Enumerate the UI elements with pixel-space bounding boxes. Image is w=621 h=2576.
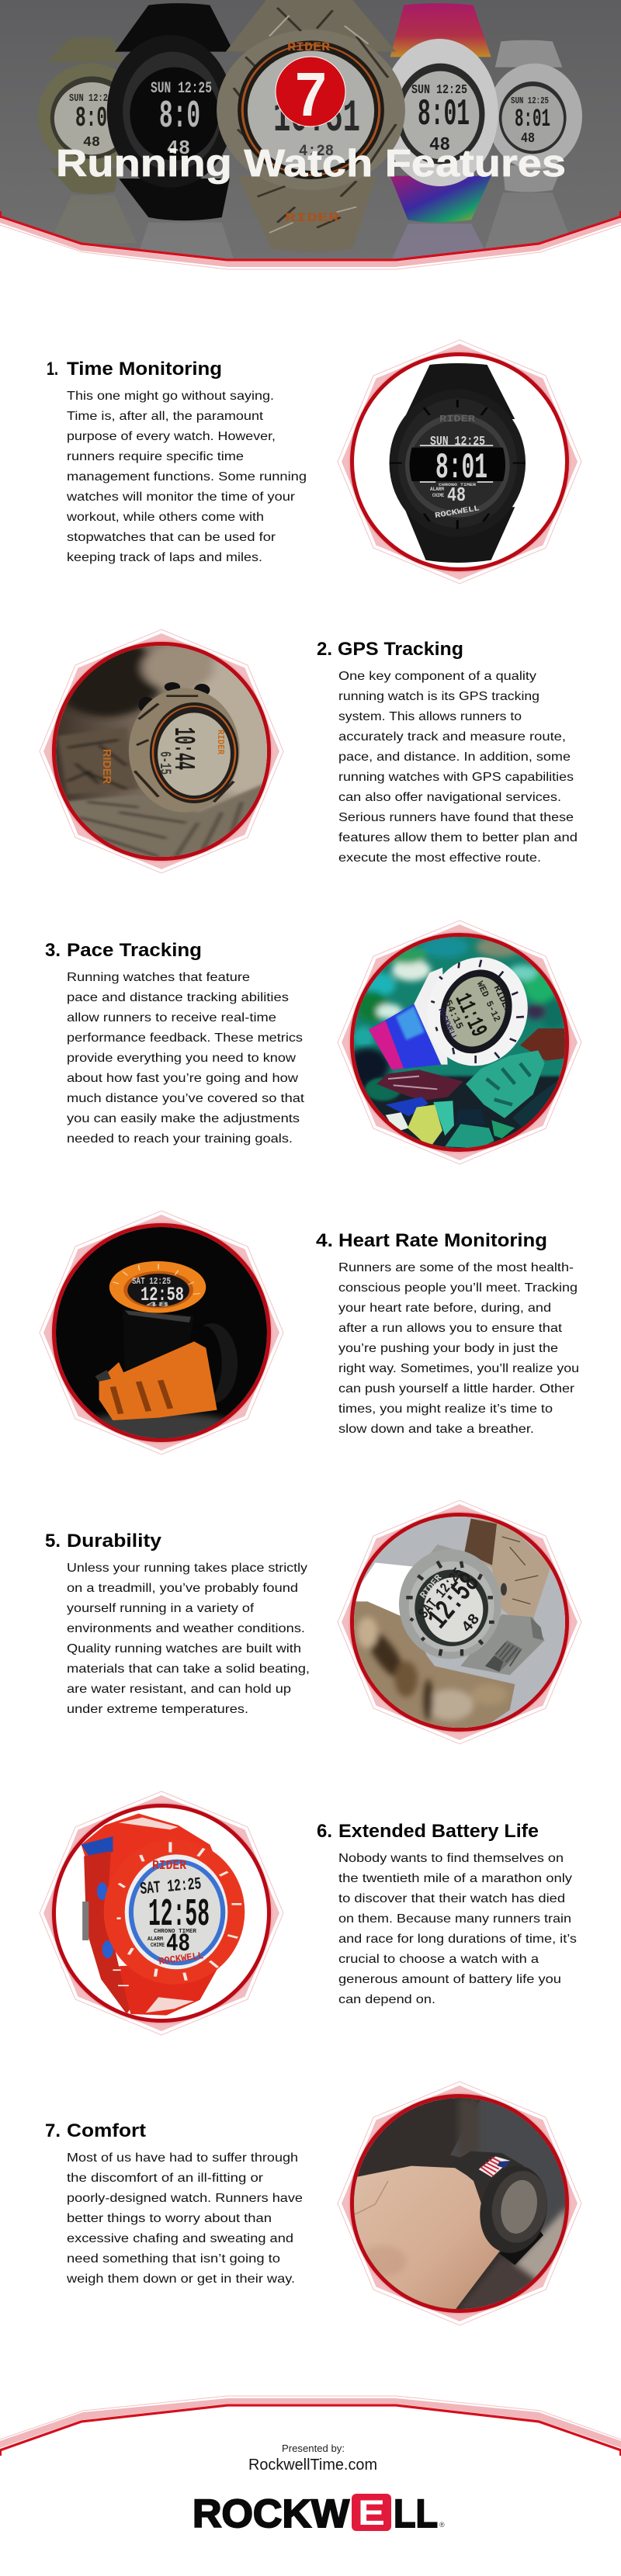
- body text 7: poorly-designed watch. Runners have: [67, 2192, 303, 2205]
- heading 6: Extended Battery Life: [338, 1821, 539, 1842]
- photo: black watch: [390, 363, 526, 563]
- photo: grey watch on branch: SAT 12:25: [415, 1565, 467, 1622]
- panel: 1 time monitoring: [47, 340, 581, 584]
- camo watch: [226, 0, 396, 52]
- octagon frame 1: [338, 340, 581, 584]
- body text 2: Serious runners have found that these: [338, 811, 574, 824]
- body text 1: runners require specific time: [67, 450, 244, 463]
- body text 4: can push yourself a little harder. Other: [338, 1382, 575, 1395]
- heading 6: 6.: [317, 1821, 332, 1842]
- badge: number 7: [276, 57, 345, 129]
- badge: number 7: 7: [295, 60, 327, 129]
- body text 6: to discover that their watch has died: [338, 1892, 565, 1905]
- presented by: Presented by:: [282, 2443, 345, 2454]
- footer wavy border: [0, 2396, 621, 2456]
- photo: orange watch on black: SAT 12:25: [132, 1276, 171, 1287]
- body text 1: This one might go without saying.: [67, 390, 274, 403]
- body text 5: are water resistant, and can hold up: [67, 1683, 291, 1696]
- body text 3: you can easily make the adjustments: [67, 1112, 300, 1125]
- body text 5: Unless your running takes place strictly: [67, 1562, 307, 1575]
- watch face readouts: 8:0: [75, 102, 107, 134]
- body text 7: need something that isn’t going to: [67, 2252, 280, 2266]
- photo: red white and blue watch: 48: [166, 1929, 190, 1958]
- watch face readouts: SUN 12:25: [511, 95, 549, 106]
- body text 4: times, you might realize it’s time to: [338, 1402, 553, 1416]
- octagon frame 5: [338, 1500, 581, 1744]
- body text 6: Nobody wants to find themselves on: [338, 1852, 564, 1865]
- body text 3: [67, 971, 305, 1146]
- photo: red white and blue watch: RIDER: [152, 1859, 187, 1874]
- body text 4: your heart rate before, during, and: [338, 1302, 551, 1315]
- photo: camo watch on wood: 6-15: [155, 751, 173, 775]
- body text 2: pace, and distance. In addition, some: [338, 751, 571, 764]
- body text 2: accurately track and measure route,: [338, 730, 566, 744]
- logo: Rockwell: [193, 2491, 445, 2536]
- heading 4: Heart Rate Monitoring: [338, 1230, 547, 1251]
- photo: camo watch on wood: 10:44: [166, 727, 199, 770]
- body text 5: [67, 1562, 310, 1716]
- logo: Rockwell: E: [358, 2493, 385, 2533]
- watch face readouts: 10:51: [273, 94, 360, 144]
- photo: black watch: ALARM: [430, 487, 444, 492]
- photo: black watch: CHIME: [432, 493, 444, 498]
- body text 2: system. This allows runners to: [338, 710, 522, 723]
- body text 1: management functions. Some running: [67, 470, 307, 484]
- photo: black watch: RIDER: [439, 414, 476, 425]
- octagon frame 6: [40, 1791, 283, 2035]
- body text 5: on a treadmill, you’ve probably found: [67, 1582, 298, 1595]
- body text 4: slow down and take a breather.: [338, 1423, 534, 1436]
- watch face readouts: 48: [83, 135, 100, 151]
- watch face readouts: 8:0: [159, 95, 200, 139]
- body text 7: better things to worry about than: [67, 2212, 272, 2225]
- octagon frame 2: [40, 629, 283, 873]
- panel: header banner: [0, 0, 621, 269]
- watch face readouts: [69, 40, 550, 225]
- heading 5: 5.: [45, 1531, 61, 1551]
- body text 5: materials that can take a solid beating,: [67, 1662, 310, 1676]
- body text 6: crucial to choose a watch with a: [338, 1953, 539, 1966]
- website: RockwellTime.com: [248, 2456, 377, 2474]
- body text 3: pace and distance tracking abilities: [67, 991, 289, 1004]
- photo: camo watch on wood: [56, 646, 267, 857]
- watch face readouts: SUN 12:25: [411, 83, 467, 98]
- heading 1: Time Monitoring: [67, 359, 222, 380]
- body text 4: right way. Sometimes, you’ll realize you: [338, 1362, 579, 1375]
- body text 4: after a run allows you to ensure that: [338, 1322, 563, 1335]
- body text 1: stopwatches that can be used for: [67, 531, 276, 544]
- black watch: [115, 3, 234, 52]
- photo: black watch: 8:01: [435, 448, 487, 488]
- body text 7: excessive chafing and sweating and: [67, 2232, 293, 2245]
- panel: 6 extended battery life: [40, 1791, 577, 2035]
- watch face readouts: 8:01: [418, 94, 470, 136]
- heading 4: 4.: [316, 1230, 333, 1251]
- body text 3: performance feedback. These metrics: [67, 1031, 303, 1045]
- body text 6: and race for long durations of time, it’s: [338, 1933, 577, 1946]
- body text 6: [338, 1852, 577, 2006]
- octagon frame 7: [338, 2082, 581, 2325]
- photo: black watch: CHRONO TIMER: [439, 483, 476, 487]
- body text 4: conscious people you’ll meet. Tracking: [338, 1281, 578, 1295]
- photo: white watch on gems: WED 5-12: [474, 979, 502, 1024]
- body text 3: much distance you’ve covered so that: [67, 1092, 305, 1105]
- photo: red white and blue watch: CHRONO TIMER: [154, 1929, 197, 1935]
- panel: 4 heart rate monitoring: [40, 1211, 579, 1454]
- watch face readouts: SUN 12:2: [69, 92, 108, 105]
- watch face readouts: 48: [429, 135, 450, 156]
- body text 2: execute the most effective route.: [338, 851, 541, 865]
- body text 6: can depend on.: [338, 1993, 435, 2006]
- body text 3: allow runners to receive real-time: [67, 1011, 276, 1025]
- photo: grey watch on branch: 48: [459, 1610, 484, 1636]
- watch face readouts: RIDER: [285, 211, 340, 225]
- body text 1: watches will monitor the time of your: [66, 491, 296, 504]
- panel: 2 gps tracking: [40, 629, 578, 873]
- photo: white watch on gems: ROCKWELL: [435, 1007, 458, 1042]
- body text 1: purpose of every watch. However,: [67, 430, 276, 443]
- photo: orange watch on black: 48: [146, 1302, 170, 1309]
- photo: grey watch on branch: [354, 1517, 565, 1728]
- photo: red white and blue watch: ROCKWELL: [158, 1950, 204, 1968]
- watch face readouts: 4:28: [299, 143, 334, 161]
- body text 7: weigh them down or get in their way.: [66, 2273, 295, 2286]
- octagon frame 3: [338, 920, 581, 1164]
- olive watch: [47, 37, 123, 62]
- panel: 5 durability: [45, 1500, 581, 1744]
- photo: black watch: ROCKWELL: [435, 504, 480, 521]
- panel: 7 comfort: [45, 2082, 581, 2325]
- body text 2: features allow them to better plan and: [338, 831, 578, 844]
- body text 3: about how fast you’re going and how: [67, 1072, 299, 1085]
- photo: black watch: SUN 12:25: [430, 435, 485, 449]
- body text 5: yourself running in a variety of: [67, 1602, 255, 1615]
- photo: red white and blue watch: 12:58: [148, 1893, 210, 1937]
- body text 2: One key component of a quality: [338, 670, 536, 683]
- photo: camo watch on wood: RIDER: [100, 749, 113, 784]
- photo: white watch on gems: [354, 937, 565, 1148]
- body text 2: running watches with GPS capabilities: [338, 771, 574, 784]
- octagon frame 4: [40, 1211, 283, 1454]
- body text 4: you’re pushing your body in just the: [338, 1342, 558, 1355]
- body text 2: running watch is its GPS tracking: [338, 690, 539, 703]
- header wavy border: [0, 211, 621, 269]
- heading 3: Pace Tracking: [67, 940, 202, 961]
- photo: grey watch on branch: RIDER: [418, 1572, 445, 1601]
- body text 6: generous amount of battery life you: [338, 1973, 561, 1986]
- body text 3: provide everything you need to know: [67, 1052, 297, 1065]
- logo: Rockwell: ROCKW: [193, 2491, 350, 2536]
- photo: red white and blue watch: CHIME: [151, 1943, 165, 1949]
- photo: red white and blue watch: [82, 1814, 245, 2016]
- body text 1: Time is, after all, the paramount: [67, 410, 264, 423]
- photo: white watch on gems: 11:19: [449, 990, 491, 1042]
- body text 6: on them. Because many runners train: [338, 1912, 571, 1926]
- photo: white watch on gems: RIDER: [491, 983, 514, 1015]
- reflections: [140, 192, 568, 259]
- body text 7: Most of us have had to suffer through: [67, 2151, 298, 2165]
- watch face readouts: 48: [167, 137, 190, 160]
- panel: 3 pace tracking: [45, 920, 581, 1164]
- watch face readouts: 48: [521, 131, 535, 147]
- photo: orange watch on black: [54, 1226, 269, 1444]
- photo: red white and blue watch: SAT 12:25: [139, 1874, 202, 1899]
- body text 1: keeping track of laps and miles.: [67, 551, 262, 564]
- watch face readouts: SUN 12:25: [151, 80, 212, 98]
- body text 1: workout, while others come with: [66, 511, 264, 524]
- body text 3: Running watches that feature: [67, 971, 250, 984]
- body text 5: under extreme temperatures.: [67, 1703, 248, 1716]
- heading 7: Comfort: [67, 2120, 146, 2141]
- body text 4: Runners are some of the most health-: [338, 1261, 574, 1274]
- heading 5: Durability: [67, 1531, 162, 1551]
- body text 6: the twentieth mile of a marathon only: [338, 1872, 572, 1885]
- title: Running Watch Features: [56, 143, 566, 185]
- body text 1: [66, 390, 307, 564]
- heading 3: 3.: [45, 940, 61, 961]
- photo: orange watch on black: 12:58: [141, 1284, 184, 1306]
- photo: watch on wrist: [354, 2098, 565, 2309]
- heading 2: 2.: [317, 639, 332, 660]
- body text 2: [338, 670, 578, 865]
- logo: Rockwell: LL: [394, 2491, 438, 2536]
- header photo of five watches: [0, 0, 621, 264]
- photo: grey watch on branch: 12:58: [422, 1567, 487, 1636]
- photo: white watch on gems: 54:15: [442, 998, 466, 1031]
- photo: red white and blue watch: ALARM: [147, 1936, 163, 1943]
- body text 7: the discomfort of an ill-fitting or: [67, 2172, 264, 2185]
- heading 1: 1.: [47, 359, 58, 380]
- body text 7: [66, 2151, 303, 2286]
- panel: footer: [0, 2396, 621, 2536]
- body text 3: needed to reach your training goals.: [67, 1132, 293, 1146]
- watch face readouts: RIDER: [287, 40, 330, 54]
- photo: camo watch on wood: RIDER: [215, 730, 226, 755]
- watch face readouts: 8:01: [515, 105, 550, 133]
- photo: black watch: 48: [447, 484, 466, 507]
- logo: Rockwell: ®: [439, 2521, 445, 2529]
- body text 4: [338, 1261, 579, 1436]
- body text 2: can also offer navigational services.: [338, 791, 561, 804]
- body text 5: Quality running watches are built with: [67, 1642, 301, 1656]
- body text 5: environments and weather conditions.: [67, 1622, 305, 1635]
- heading 2: GPS Tracking: [338, 639, 463, 660]
- white watch: [495, 40, 562, 68]
- heading 7: 7.: [45, 2120, 61, 2141]
- tie dye watch: [390, 3, 491, 57]
